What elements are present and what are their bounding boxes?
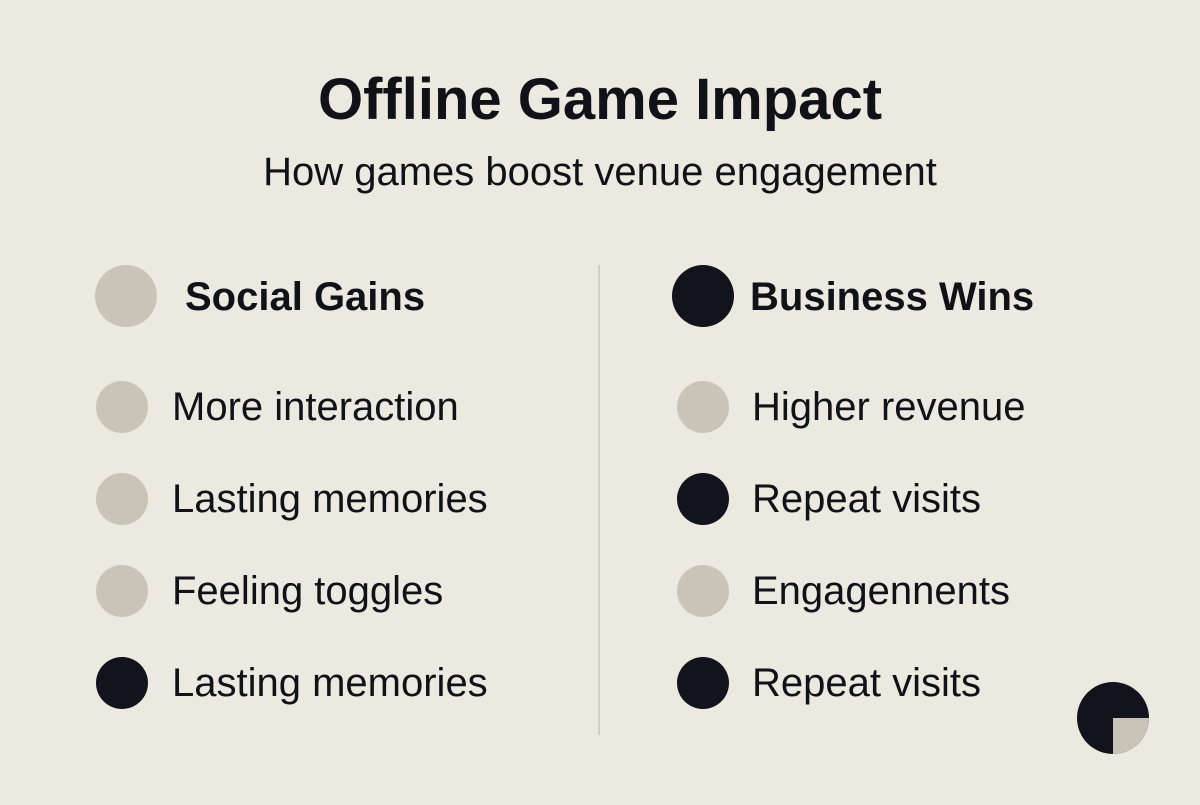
item: lasting memories dark: Lasting memories: [172, 661, 488, 705]
heading: social gains: Social Gains: [185, 275, 425, 319]
title: Offline Game Impact: [318, 67, 882, 132]
item: engagements: [677, 565, 1010, 617]
item: repeat visits: Repeat visits: [752, 477, 981, 521]
heading: business wins: [672, 265, 1034, 327]
item: repeat visits dark: [677, 657, 981, 709]
item: higher revenue: Higher revenue: [752, 385, 1026, 429]
item: engagements: Engagennents: [752, 569, 1010, 613]
item: feeling toggles: Feeling toggles: [172, 569, 443, 613]
heading: business wins: Business Wins: [750, 275, 1034, 319]
divider: [598, 265, 600, 735]
heading: social gains: [95, 265, 425, 327]
item: lasting memories: Lasting memories: [172, 477, 488, 521]
item: lasting memories dark: [96, 657, 488, 709]
item: repeat visits dark: Repeat visits: [752, 661, 981, 705]
item: more interaction: More interaction: [172, 385, 459, 429]
item: higher revenue: [677, 381, 1026, 433]
panel: social gains: [95, 265, 488, 709]
item: more interaction: [96, 381, 459, 433]
subtitle: How games boost venue engagement: [263, 150, 937, 194]
panel: business wins: [672, 265, 1034, 709]
item: lasting memories: [96, 473, 488, 525]
icon: pie chart: [1077, 682, 1149, 754]
item: feeling toggles: [96, 565, 443, 617]
item: repeat visits: [677, 473, 981, 525]
